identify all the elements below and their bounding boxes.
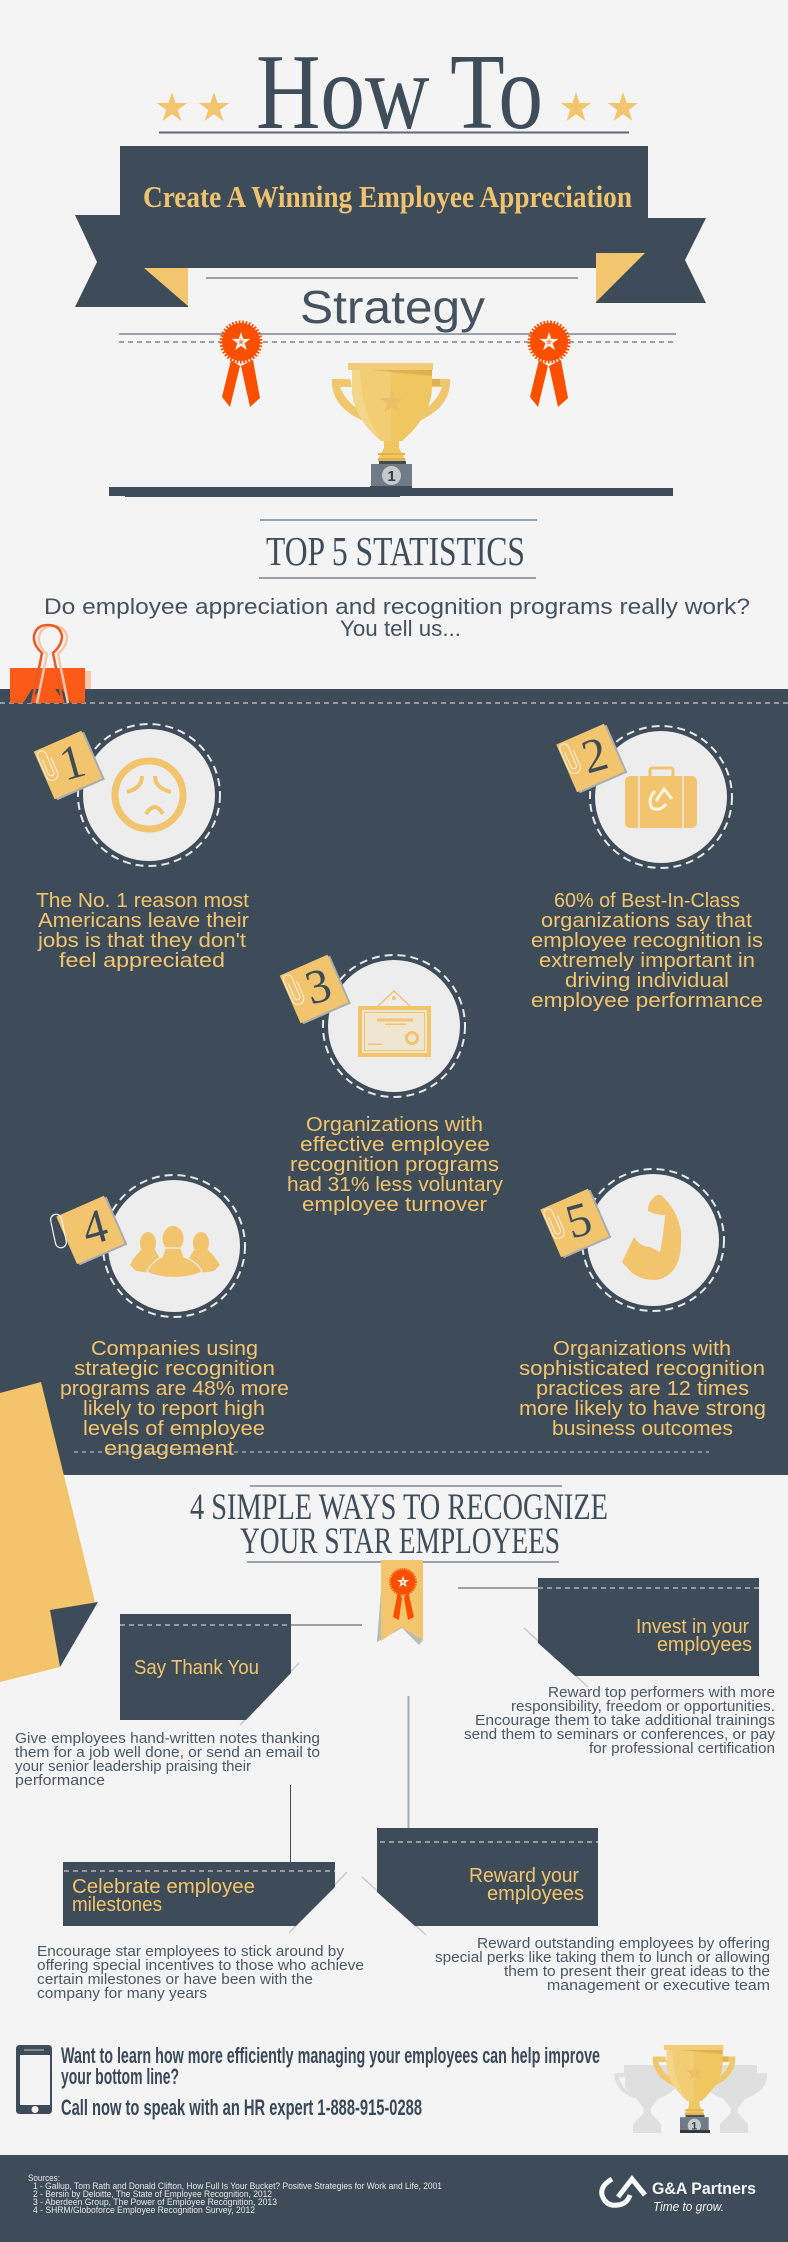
- sources: 4 - SHRM/Globoforce Employee Recognition Survey, 2012: [33, 2205, 255, 2215]
- stat 1 text: feel appreciated: [59, 950, 225, 972]
- footer band: [0, 2155, 788, 2242]
- card: Reward your employees: employees: [487, 1883, 584, 1905]
- sources: [28, 2173, 442, 2215]
- card: Reward your employees: Reward your: [469, 1865, 579, 1887]
- stat 5 text: Organizations with: [553, 1338, 731, 1360]
- text: invest description: Encourage them to take additional trainings: [475, 1713, 775, 1729]
- stat 1 text: The No. 1 reason most: [36, 890, 249, 912]
- card: Say Thank You: Say Thank You: [134, 1657, 259, 1679]
- icon: briefcase: [625, 768, 697, 828]
- stat 5 text: sophisticated recognition: [519, 1358, 765, 1380]
- paperclip 4: [50, 1213, 67, 1249]
- stat 3 text: employee turnover: [302, 1194, 487, 1216]
- icon: flexed arm: [622, 1195, 681, 1280]
- card: Celebrate employee milestones: Celebrate employee: [72, 1876, 255, 1898]
- stat 3: [279, 952, 503, 1216]
- text: celebrate description: certain milestones or have been with the: [37, 1972, 313, 1988]
- stat 5 text: more likely to have strong: [519, 1398, 766, 1420]
- icon: bookmark ribbon: [377, 1560, 423, 1645]
- text: invest description: send them to seminars or conferences, or pay: [464, 1727, 776, 1743]
- logo: G&A Partners: [602, 2179, 756, 2214]
- sticky note 2: [555, 721, 627, 794]
- stat 2 text: 60% of Best-In-Class: [554, 890, 740, 912]
- stat 2: [531, 721, 763, 1012]
- stat 5 text: practices are 12 times: [536, 1378, 749, 1400]
- icon: smartphone: [16, 2045, 52, 2114]
- sources: Sources:: [28, 2173, 60, 2183]
- icon: right rosette: [529, 322, 569, 407]
- text: say thank you description: them for a job well done, or send an email to: [15, 1745, 320, 1761]
- stat 2 text: employee performance: [531, 990, 763, 1012]
- sticky note 5: 5: [560, 1192, 598, 1249]
- icon: left rosette: [221, 322, 261, 407]
- stat 3 text: Organizations with: [306, 1114, 483, 1136]
- stat 4 text: engagement: [104, 1438, 235, 1460]
- call to action text: [61, 2043, 600, 2120]
- heading: Strategy: Strategy: [300, 281, 485, 333]
- title: How To: How To: [256, 33, 543, 152]
- circle badge: [582, 1169, 724, 1311]
- icon: binder clip: [10, 625, 91, 703]
- stat 4 text: programs are 48% more: [60, 1378, 289, 1400]
- circle badge: [323, 955, 465, 1097]
- card: Invest in your employees: [458, 1578, 759, 1687]
- stat 1 text: Americans leave their: [38, 910, 249, 932]
- stat 5 text: business outcomes: [552, 1418, 733, 1440]
- sticky note 3: [279, 952, 351, 1025]
- sticky note 3: 3: [300, 958, 337, 1015]
- text: say thank you description: Give employees hand-written notes thanking: [15, 1731, 320, 1747]
- gold folded paper: [0, 1382, 98, 1682]
- sticky note 1: 1: [54, 734, 91, 791]
- icon: trophy: [332, 363, 450, 486]
- stat 3 text: [287, 1114, 503, 1216]
- stat 4 text: likely to report high: [83, 1398, 265, 1420]
- sources: 3 - Aberdeen Group, The Power of Employee Recognition, 2013: [33, 2197, 277, 2207]
- stat 5: [519, 1169, 766, 1440]
- card: Celebrate employee milestones: milestones: [72, 1894, 162, 1916]
- stat 1 text: [36, 890, 249, 972]
- banner subtitle: Create A Winning Employee Appreciation: [143, 179, 632, 214]
- dark statistics panel: [0, 689, 788, 1475]
- intro text: You tell us...: [340, 616, 461, 641]
- call to action text: your bottom line?: [61, 2064, 179, 2089]
- heading: top 5 statistics: TOP 5 STATISTICS: [266, 528, 525, 574]
- logo: G&A Partners: Time to grow.: [653, 2199, 724, 2214]
- stat 4 text: [60, 1338, 289, 1460]
- connector lines: [290, 1696, 410, 1862]
- text: celebrate description: company for many years: [37, 1986, 207, 2002]
- text: celebrate description: [37, 1944, 364, 2002]
- text: invest description: [464, 1685, 776, 1757]
- sticky note 2: 2: [576, 727, 614, 784]
- card: Say Thank You: [120, 1614, 362, 1725]
- sticky note 1: [33, 728, 105, 801]
- stat 1: [33, 724, 249, 972]
- ribbon banner: [75, 146, 706, 307]
- icon: people: [130, 1226, 220, 1278]
- text: say thank you description: performance: [15, 1773, 105, 1789]
- icon: certificate: [358, 991, 431, 1057]
- icon: sad face: [115, 761, 183, 829]
- sources: 2 - Bersin by Deloitte, The State of Employee Recognition, 2012: [33, 2189, 272, 2199]
- icon: trophies group: [615, 2045, 767, 2133]
- stat 3 text: effective employee: [300, 1134, 490, 1156]
- stat 3 text: recognition programs: [290, 1154, 499, 1176]
- intro text: [44, 594, 750, 641]
- stat 4: [50, 1175, 289, 1460]
- text: invest description: Reward top performers with more: [548, 1685, 775, 1701]
- text: celebrate description: Encourage star employees to stick around by: [37, 1944, 345, 1960]
- icon: gold stars: [157, 92, 638, 121]
- stat 4 text: strategic recognition: [74, 1358, 275, 1380]
- text: celebrate description: offering special incentives to those who achieve: [37, 1958, 364, 1974]
- text: reward description: special perks like taking them to lunch or allowing: [435, 1950, 770, 1966]
- heading: 4 simple ways: 4 SIMPLE WAYS TO RECOGNIZE: [190, 1487, 608, 1528]
- call to action text: Call now to speak with an HR expert 1-888-915-0288: [61, 2095, 422, 2120]
- text: invest description: for professional certification: [589, 1741, 775, 1757]
- intro text: Do employee appreciation and recognition programs really work?: [44, 594, 750, 619]
- stat 4 text: levels of employee: [83, 1418, 265, 1440]
- card: Celebrate employee milestones: [63, 1862, 347, 1933]
- stat 2 text: driving individual: [565, 970, 729, 992]
- card: Invest in your employees: Invest in your: [636, 1616, 749, 1638]
- stat 1 text: jobs is that they don't: [37, 930, 246, 952]
- sticky note 4: [55, 1193, 127, 1266]
- stat 4 text: Companies using: [91, 1338, 258, 1360]
- stat 2 text: [531, 890, 763, 1012]
- heading: 4 simple ways: YOUR STAR EMPLOYEES: [240, 1521, 560, 1562]
- text: say thank you description: [15, 1731, 320, 1789]
- text: say thank you description: your senior leadership praising their: [15, 1759, 251, 1775]
- card: Reward your employees: [362, 1828, 598, 1935]
- text: reward description: management or executive team: [547, 1978, 770, 1994]
- sources: 1 - Gallup, Tom Rath and Donald Clifton, How Full Is Your Bucket? Positive Strategies for Work and Life, 2001: [33, 2181, 442, 2191]
- text: reward description: Reward outstanding employees by offering: [477, 1936, 770, 1952]
- circle badge: [103, 1175, 245, 1317]
- text: reward description: them to present their great ideas to the: [504, 1964, 770, 1980]
- sticky note 4: 4: [76, 1199, 114, 1256]
- heading: 4 simple ways: [190, 1485, 608, 1563]
- circle badge: [78, 724, 220, 866]
- sticky note 5: [539, 1186, 611, 1259]
- stat 2 text: employee recognition is: [531, 930, 763, 952]
- text: reward description: [435, 1936, 770, 1994]
- circle badge: [590, 726, 732, 868]
- stat 2 text: extremely important in: [539, 950, 755, 972]
- trophy ground bar: [109, 486, 673, 497]
- stat 3 text: had 31% less voluntary: [287, 1174, 503, 1196]
- stat 5 text: [519, 1338, 766, 1440]
- stat 2 text: organizations say that: [541, 910, 752, 932]
- logo: G&A Partners: G&A Partners: [652, 2179, 756, 2198]
- card: Invest in your employees: employees: [657, 1634, 752, 1656]
- text: invest description: responsibility, freedom or opportunities.: [511, 1699, 775, 1715]
